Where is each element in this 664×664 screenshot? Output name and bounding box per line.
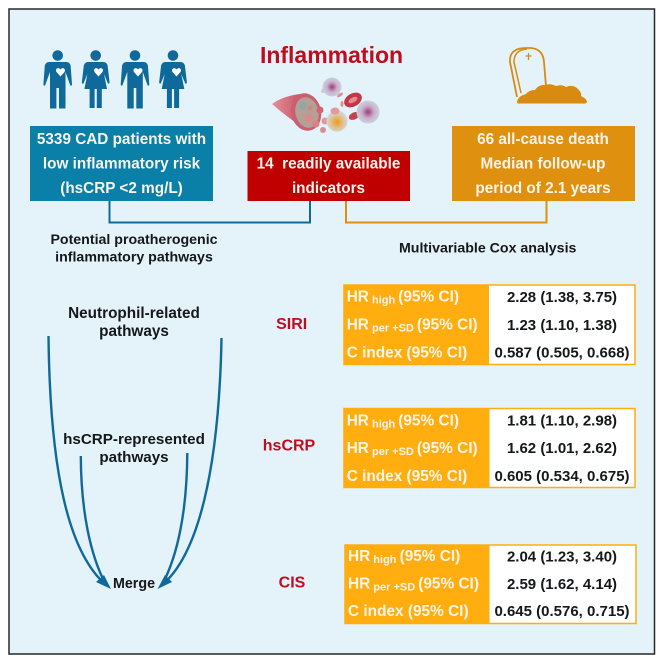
arrowhead: left — [96, 575, 111, 589]
table: SIRI results: per +SD — [369, 322, 417, 334]
label: SIRI: SIRI — [276, 316, 307, 333]
table: SIRI results: (95% CI) — [417, 316, 478, 333]
table: SIRI results: 0.587 (0.505, 0.668) — [494, 344, 630, 361]
table: SIRI results: HR — [347, 316, 369, 333]
panel: patients box: low inflammatory risk — [43, 156, 201, 172]
table: CIS results: per +SD — [370, 582, 418, 594]
table: SIRI results: high — [369, 295, 398, 307]
label: hsCRP pathways: hsCRP-represented — [63, 431, 205, 448]
table: hsCRP results — [344, 408, 635, 488]
arrow: neutrophil left — [48, 336, 106, 585]
table: CIS results: 0.645 (0.576, 0.715) — [494, 603, 630, 620]
label: neutrophil pathways — [68, 305, 200, 340]
label: hsCRP: hsCRP — [263, 438, 316, 455]
table: hsCRP results: high — [369, 419, 398, 431]
table: hsCRP results: HR — [347, 440, 369, 457]
table: SIRI results: C index (95% CI) — [347, 344, 467, 361]
icon: male patient — [43, 50, 72, 108]
icon: burial mound — [517, 84, 587, 104]
arrow: hsCRP right — [162, 453, 187, 585]
icon: patient group — [43, 50, 187, 108]
table: CIS results — [345, 545, 636, 624]
table: CIS results: (95% CI) — [418, 576, 479, 592]
label: merge: Merge — [113, 576, 155, 592]
label: neutrophil pathways: pathways — [99, 323, 169, 340]
panel: patients box: 5339 CAD patients with — [37, 131, 206, 148]
icon: blood vessel and inflammatory cells — [272, 78, 380, 134]
table: SIRI results: 2.28 (1.38, 3.75) — [507, 289, 617, 306]
table: CIS results: HR — [348, 548, 370, 565]
icon: cross — [526, 53, 532, 60]
icon: gravestone — [510, 48, 587, 104]
panel: indicators box: indicators — [292, 180, 365, 197]
arrow: neutrophil right — [162, 338, 222, 585]
table: CIS results: 2.59 (1.62, 4.14) — [507, 576, 617, 593]
icon: female patient — [159, 50, 187, 108]
panel: outcomes box: 66 all-cause death — [477, 131, 609, 148]
table: SIRI results — [344, 285, 635, 364]
panel: outcomes box: period of 2.1 years — [475, 180, 611, 197]
panel: outcomes box: Median follow-up — [481, 156, 605, 172]
label: neutrophil pathways: Neutrophil-related — [68, 305, 200, 322]
table: CIS results: 2.04 (1.23, 3.40) — [507, 548, 617, 566]
table: hsCRP results: 1.81 (1.10, 2.98) — [507, 413, 617, 430]
heading: proatherogenic pathways: Potential proatherogenic — [50, 232, 218, 248]
table: CIS results: HR — [348, 576, 370, 592]
icon: male patient — [121, 50, 149, 108]
table: hsCRP results: (95% CI) — [398, 413, 459, 430]
heading: proatherogenic pathways — [50, 232, 218, 266]
table: hsCRP results: 1.62 (1.01, 2.62) — [507, 440, 617, 457]
title: Inflammation — [260, 42, 403, 68]
arrowhead: right — [158, 575, 172, 589]
panel: indicators box: 14 readily available — [257, 156, 400, 172]
table: hsCRP results: HR — [347, 413, 369, 430]
table: SIRI results: (95% CI) — [398, 289, 459, 306]
table: hsCRP results: per +SD — [369, 446, 417, 458]
label: CIS: CIS — [279, 575, 306, 592]
connector: blue bracket — [110, 201, 310, 222]
table: hsCRP results: C index (95% CI) — [347, 468, 467, 485]
label: hsCRP pathways — [63, 431, 205, 466]
heading: proatherogenic pathways: inflammatory pathways — [55, 250, 213, 266]
connector: orange bracket — [346, 201, 546, 222]
panel: patients box: (hsCRP <2 mg/L) — [60, 180, 183, 197]
table: hsCRP results: (95% CI) — [417, 440, 478, 457]
label: hsCRP pathways: pathways — [99, 449, 169, 466]
table: CIS results: high — [370, 554, 400, 566]
panel: outcomes box — [452, 126, 635, 201]
table: hsCRP results: 0.605 (0.534, 0.675) — [494, 468, 630, 485]
heading: Cox analysis: Multivariable Cox analysis — [399, 241, 577, 257]
arrows: pathways to merge — [48, 336, 222, 589]
table: CIS results: (95% CI) — [400, 548, 460, 565]
panel: patients box — [30, 126, 213, 201]
table: CIS results: C index (95% CI) — [348, 603, 469, 620]
arrow: hsCRP left — [81, 456, 106, 585]
table: SIRI results: HR — [347, 289, 369, 306]
panel: indicators box — [248, 151, 410, 201]
icon: female patient — [82, 50, 110, 108]
table: SIRI results: 1.23 (1.10, 1.38) — [507, 317, 617, 334]
